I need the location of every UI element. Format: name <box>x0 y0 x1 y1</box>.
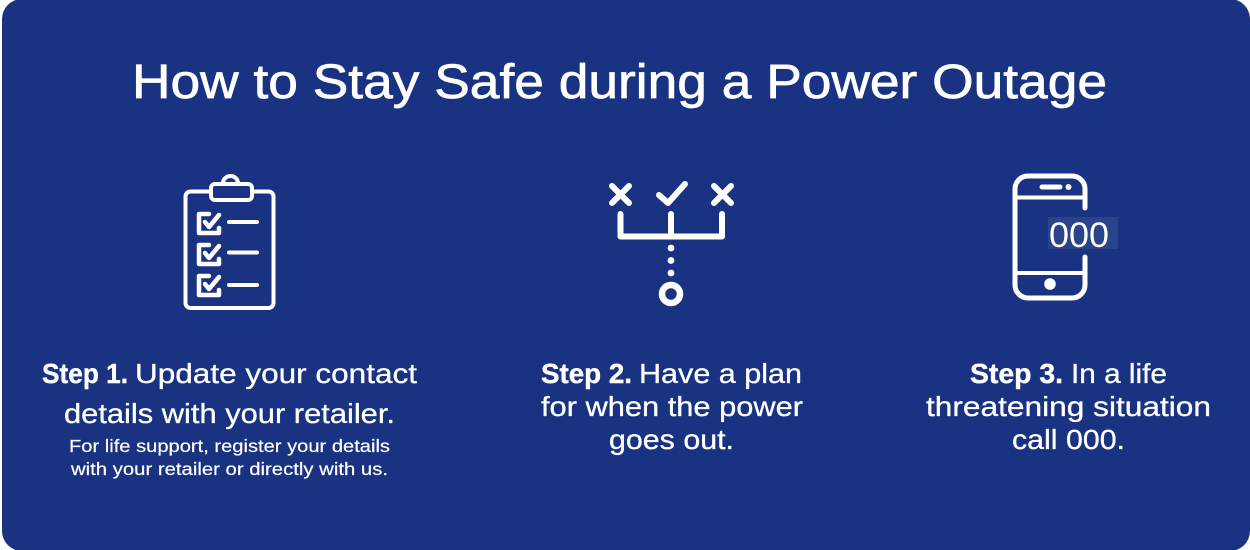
step 1 text: with your retailer or directly with us. <box>70 459 388 479</box>
step 1 text <box>42 358 417 479</box>
step 1 text: Update your contact <box>135 358 417 389</box>
step 2 text <box>541 358 803 455</box>
step 2 text: for when the power <box>541 391 803 422</box>
title: How to Stay Safe during a Power Outage <box>132 56 1107 109</box>
step 3 text <box>926 358 1211 455</box>
step 2 text: Have a plan <box>639 358 802 389</box>
step 2 text: Step 2. <box>541 358 632 389</box>
step 1 text: For life support, register your details <box>69 436 390 456</box>
icon: clipboard checklist <box>186 176 274 308</box>
step 1 text: details with your retailer. <box>64 398 395 429</box>
step 3 text: Step 3. <box>970 358 1063 389</box>
step 3 text: call 000. <box>1012 424 1125 455</box>
icon: decision path <box>612 184 731 303</box>
step 2 text: goes out. <box>609 424 734 455</box>
icon: phone with 000 <box>1015 176 1118 298</box>
step 1 text: Step 1. <box>42 358 128 389</box>
step 3 text: threatening situation <box>926 391 1211 422</box>
icon: phone with 000: 000 <box>1049 216 1109 255</box>
step 3 text: In a life <box>1071 358 1167 389</box>
